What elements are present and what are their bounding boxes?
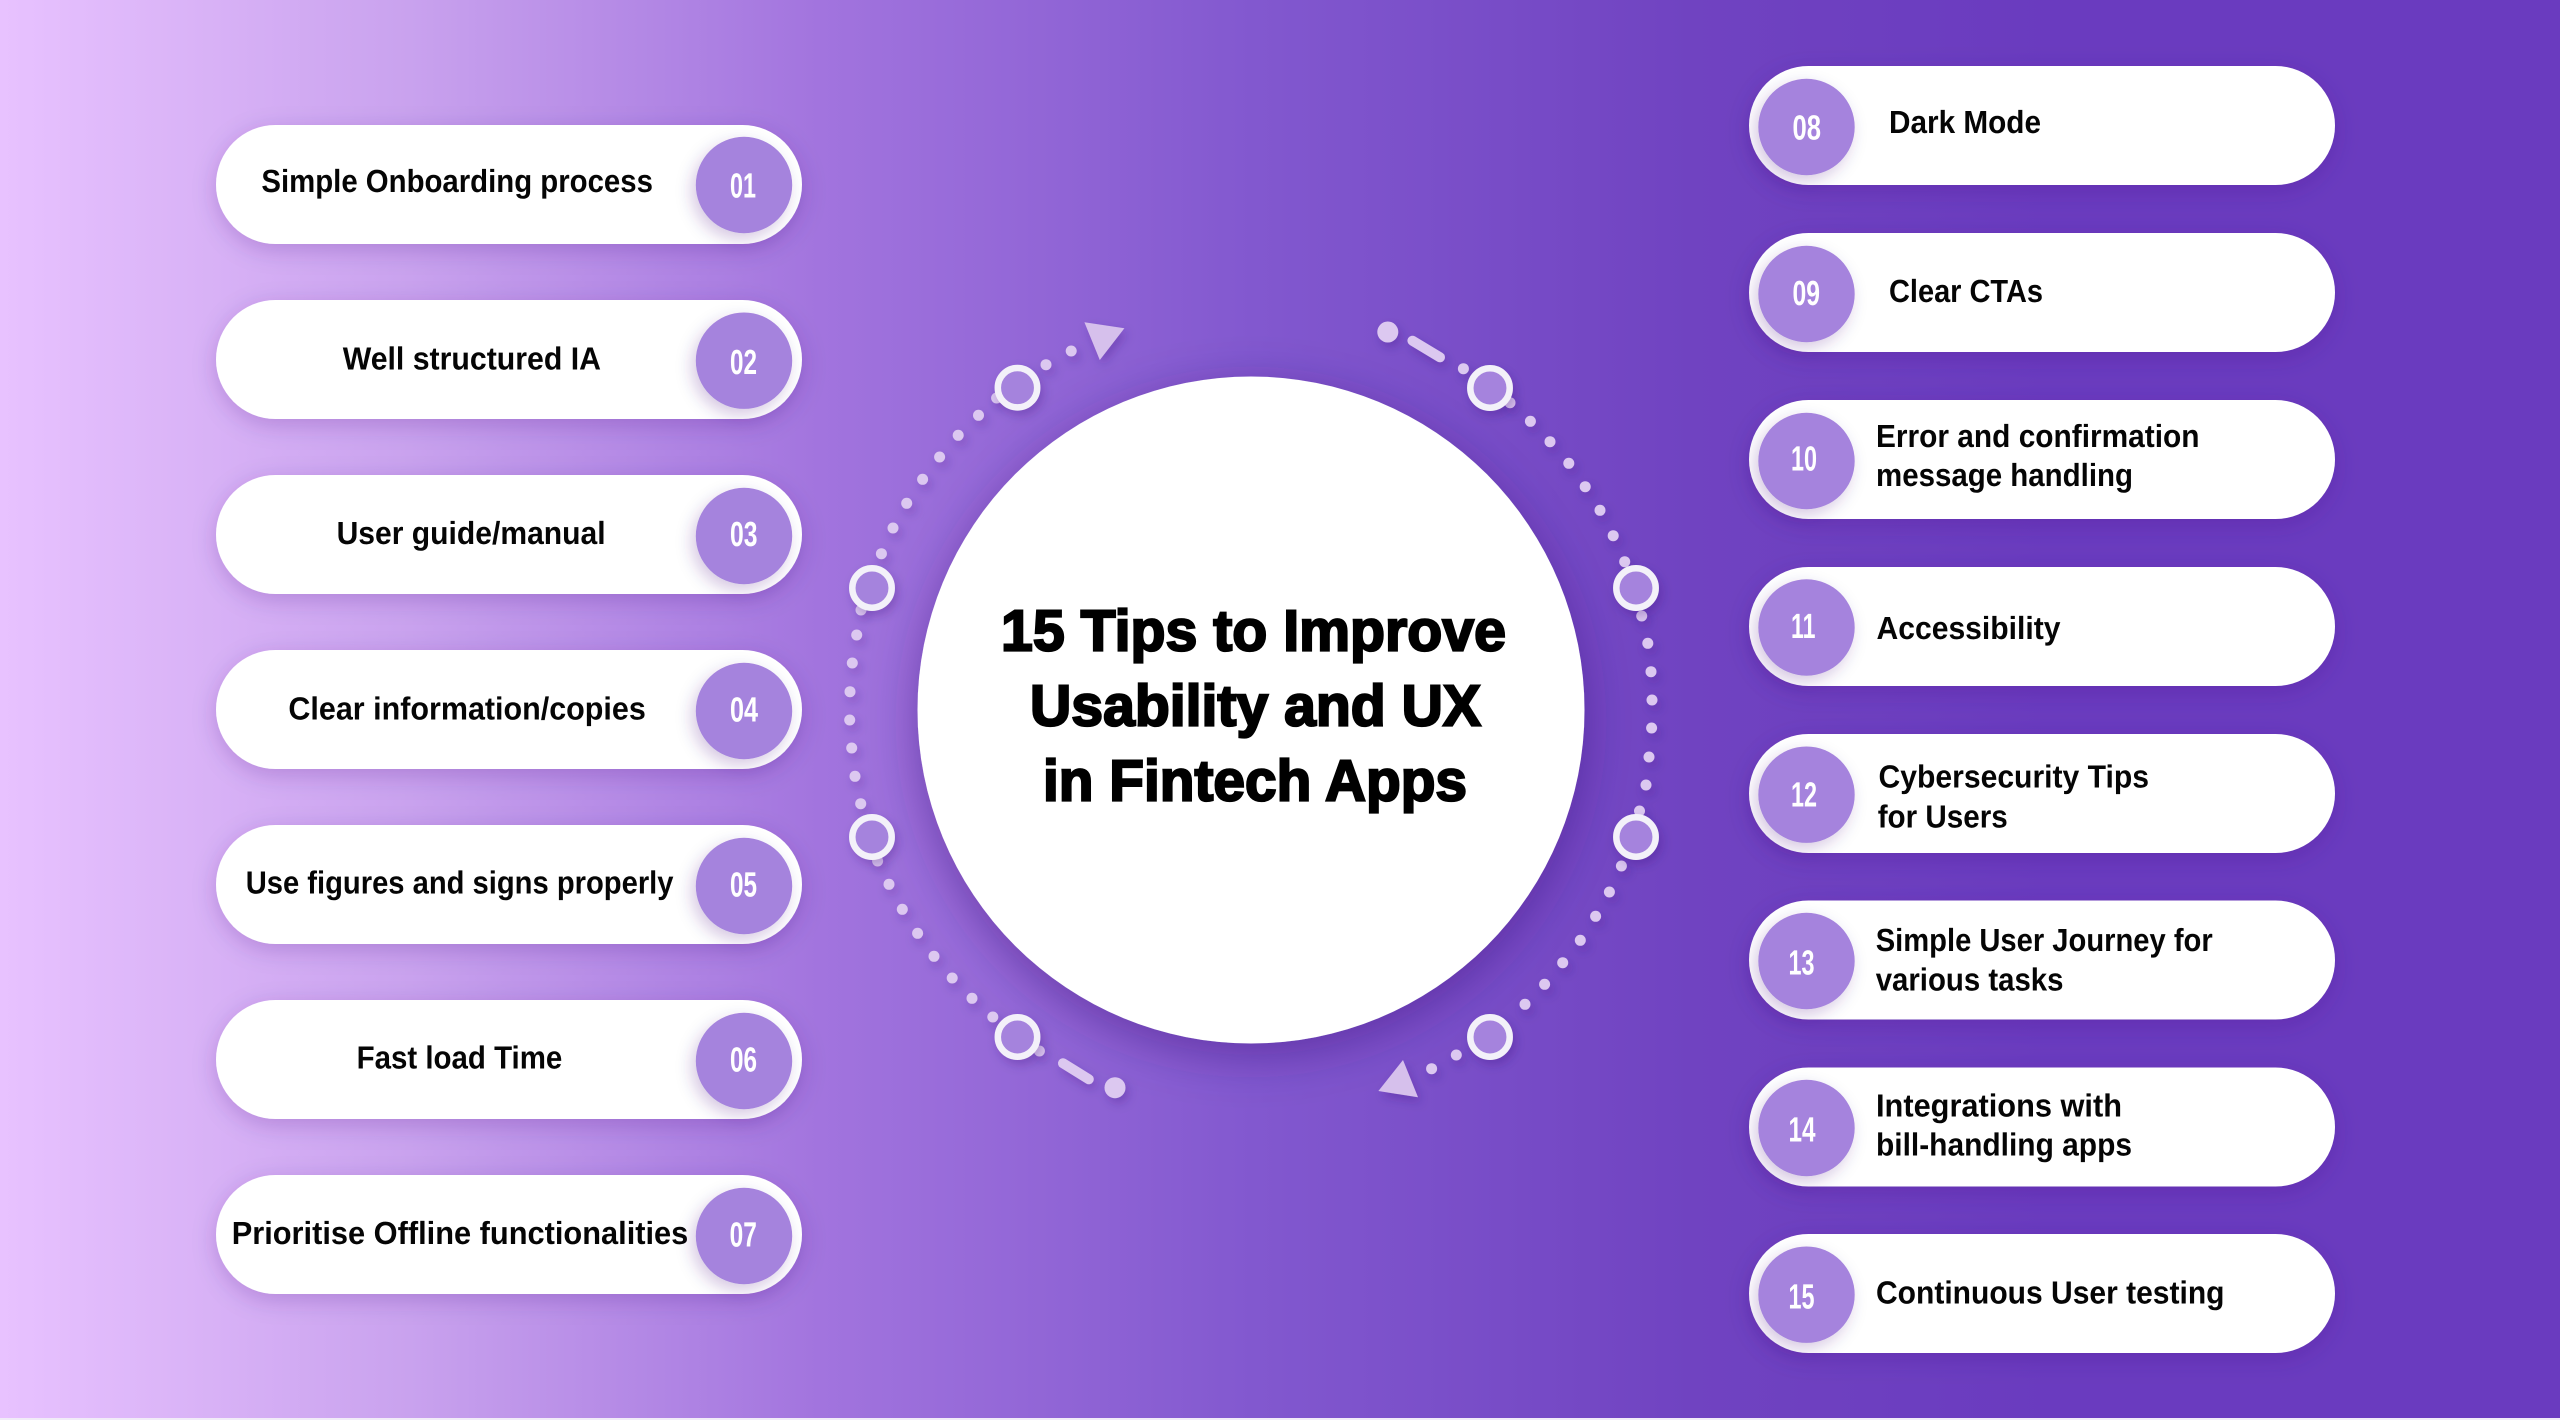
label 03: User guide/manual: [337, 515, 606, 551]
badge 04: [696, 663, 792, 759]
badge 07: [696, 1188, 792, 1284]
label 01: Simple Onboarding process: [261, 163, 653, 199]
label 12: for Users: [1878, 798, 2008, 834]
badge 14: [1758, 1080, 1855, 1176]
title: 15 Tips to Improve: [1001, 598, 1506, 664]
badge 13: 13: [1788, 944, 1814, 983]
arrowhead: upper left: [1084, 322, 1124, 360]
badge 11: [1758, 579, 1855, 676]
badge 03: [696, 488, 792, 584]
label 13: Simple User Journey for: [1876, 922, 2213, 958]
badge 10: 10: [1791, 440, 1817, 479]
ring nodes around circle: [852, 368, 1656, 1057]
title: in Fintech Apps: [1043, 748, 1467, 814]
tip 06: [216, 1000, 802, 1119]
badge 07: 07: [730, 1216, 757, 1255]
tip 02: [216, 300, 802, 419]
badge 11: 11: [1791, 607, 1815, 646]
label 12: Cybersecurity Tips: [1878, 758, 2149, 794]
tip 15: [1749, 1234, 2335, 1353]
label 14: [1876, 1088, 2132, 1163]
badge 09: [1758, 246, 1855, 342]
label 02: Well structured IA: [343, 340, 601, 376]
tip 01: [216, 125, 802, 244]
tip 14: [1749, 1068, 2335, 1186]
badge 02: [696, 312, 792, 409]
label 13: various tasks: [1876, 962, 2064, 998]
tip 05: [216, 825, 802, 944]
badge 12: [1758, 746, 1855, 843]
badge 10: [1758, 413, 1855, 509]
dotted arc: right side: [1458, 363, 1658, 816]
tip 04: [216, 650, 802, 769]
central circle: [918, 376, 1584, 1044]
badge 08: [1758, 79, 1855, 175]
label 04: Clear information/copies: [288, 690, 646, 726]
badge 14: 14: [1788, 1111, 1816, 1150]
label 11: Accessibility: [1876, 610, 2061, 646]
dotted arc: upper left with arrow: [851, 322, 1124, 640]
badge 03: 03: [730, 515, 758, 554]
badge 01: 01: [730, 166, 756, 205]
label 06: Fast load Time: [357, 1040, 562, 1076]
label 14: bill-handling apps: [1876, 1127, 2132, 1163]
tip 03: [216, 475, 802, 594]
tip 10: [1749, 400, 2335, 519]
tip 13: [1749, 900, 2335, 1020]
badge 01: [696, 137, 792, 233]
label 10: message handling: [1876, 457, 2133, 493]
badge 06: [696, 1013, 792, 1109]
badge 08: 08: [1792, 109, 1821, 148]
title: [1001, 598, 1506, 814]
badge 06: 06: [730, 1040, 757, 1080]
label 10: [1876, 418, 2200, 493]
tip 09: [1749, 233, 2335, 352]
label 15: Continuous User testing: [1876, 1274, 2224, 1310]
badge 12: 12: [1791, 775, 1817, 814]
tip 11: [1749, 567, 2335, 686]
arc end: lower left dash and dot: [1063, 1063, 1126, 1098]
dotted arc: left side: [844, 658, 1045, 1056]
badge 02: 02: [730, 343, 757, 382]
badge 09: 09: [1792, 274, 1820, 313]
label 08: Dark Mode: [1889, 104, 2041, 140]
badge 04: 04: [730, 690, 758, 729]
tip 12: [1749, 734, 2335, 853]
label 05: Use figures and signs properly: [246, 864, 674, 900]
badge 05: [696, 838, 792, 934]
arc end: upper right dash and dot: [1377, 322, 1440, 357]
label 10: Error and confirmation: [1876, 418, 2200, 454]
label 14: Integrations with: [1876, 1088, 2122, 1124]
badge 15: 15: [1788, 1277, 1814, 1316]
badge 13: [1758, 913, 1855, 1009]
badge 05: 05: [730, 865, 757, 904]
title: Usability and UX: [1030, 674, 1481, 738]
arrowhead: lower right: [1378, 1060, 1418, 1097]
badge 15: [1758, 1246, 1855, 1343]
tip 08: [1749, 66, 2335, 185]
label 09: Clear CTAs: [1889, 273, 2043, 309]
dotted arc: lower right with arrow: [1378, 860, 1627, 1097]
label 07: Prioritise Offline functionalities: [232, 1215, 688, 1251]
label 13: [1876, 922, 2213, 998]
tip 07: [216, 1175, 802, 1294]
label 12: [1878, 758, 2149, 834]
